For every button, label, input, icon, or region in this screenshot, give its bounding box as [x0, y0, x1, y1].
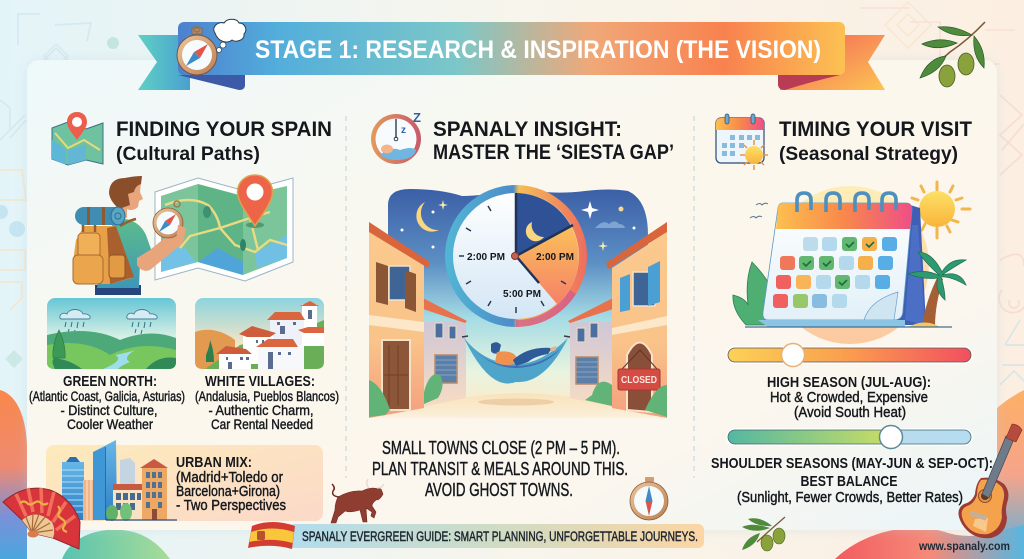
heading text: SPANALY INSIGHT:	[433, 118, 622, 141]
heading second line: MASTER THE ‘SIESTA GAP’	[433, 141, 674, 164]
icon: compass bottom	[630, 477, 668, 520]
heading text: FINDING YOUR SPAIN	[116, 118, 332, 141]
siesta clock	[445, 185, 587, 327]
ground line	[745, 326, 952, 328]
icon: compass with thought cloud	[177, 19, 246, 75]
hammock	[462, 336, 570, 384]
text: siesta advice: PLAN TRANSIT & MEALS AROUND THIS.	[372, 458, 628, 479]
website url: www.spanaly.com	[918, 539, 1010, 553]
icon: guitar	[958, 424, 1022, 538]
illustration: traveler with map	[73, 175, 293, 295]
closed sign	[618, 350, 660, 390]
text: shoulder seasons: (Sunlight, Fewer Crowds, Better Rates)	[737, 490, 963, 506]
decorative background patterns	[0, 2, 1024, 385]
text: green north: (Atlantic Coast, Galicia, Asturias)	[29, 389, 185, 404]
halo	[771, 186, 929, 344]
icon: bull	[331, 479, 384, 523]
card: green north illustration	[47, 298, 176, 369]
icon: olive branch top right	[920, 22, 985, 87]
icon: red fan	[3, 488, 80, 549]
fold-out map	[155, 178, 293, 281]
right houses	[568, 222, 667, 418]
text: high season: HIGH SEASON (JUL-AUG):	[767, 374, 931, 391]
text: green north: - Distinct Culture,	[60, 402, 158, 418]
card: urban mix	[46, 440, 323, 521]
icon: sleep clock: z	[401, 125, 406, 136]
city skyline	[62, 440, 177, 521]
text: siesta advice	[372, 437, 628, 500]
footer banner: SPANALY EVERGREEN GUIDE: SMART PLANNING, UNFORGETTABLE JOURNEYS.	[302, 529, 698, 544]
title text: STAGE 1: RESEARCH & INSPIRATION (THE VISION)	[255, 36, 821, 64]
ground	[369, 393, 668, 418]
icon: olive branch footer	[742, 517, 785, 551]
bushes	[369, 374, 667, 417]
urban mix text: URBAN MIX:	[176, 454, 252, 471]
text: green north	[29, 373, 185, 432]
sun	[912, 182, 970, 238]
calendar day cells	[773, 237, 897, 308]
card: white villages illustration	[195, 298, 324, 369]
left leaf	[733, 262, 770, 325]
page curl	[864, 292, 898, 320]
subheading text: (Seasonal Strategy)	[779, 144, 958, 165]
text: high season	[767, 374, 931, 421]
text: shoulder seasons: BEST BALANCE	[800, 473, 898, 490]
evening sky	[388, 186, 648, 405]
title ribbon	[138, 22, 885, 90]
birds	[750, 203, 768, 218]
palm tree	[908, 252, 966, 326]
urban mix text: (Madrid+Toledo or	[176, 469, 283, 486]
text: white villages: (Andalusia, Pueblos Blancos)	[195, 389, 339, 404]
calendar rings	[797, 193, 896, 212]
main panel	[27, 60, 997, 530]
text: green north: Cooler Weather	[67, 416, 153, 432]
ribbon tail right	[780, 35, 885, 90]
siesta clock: 2:00 PM	[536, 251, 574, 263]
text: white villages: Car Rental Needed	[211, 416, 313, 432]
illustration: calendar scene	[733, 182, 970, 344]
slider: high season	[726, 344, 973, 366]
icon: sleep clock	[371, 110, 421, 164]
icon: sleep clock: Z	[413, 110, 421, 125]
heading: timing your visit	[716, 114, 972, 170]
heading: finding your spain	[52, 112, 332, 165]
siesta clock: 2:00 PM	[467, 251, 505, 263]
ribbon main band	[178, 22, 845, 75]
column dividers	[346, 116, 694, 478]
footer banner	[288, 524, 704, 548]
icon: spanish flag	[248, 522, 295, 549]
bottom corner colour blobs	[0, 390, 1024, 559]
text: shoulder seasons	[711, 455, 993, 506]
closed sign: CLOSED	[621, 375, 657, 386]
ribbon tail left	[138, 35, 190, 90]
illustration: siesta scene	[369, 185, 668, 418]
ribbon fold left	[178, 75, 245, 90]
text: white villages: WHITE VILLAGES:	[205, 373, 315, 390]
calendar page	[763, 203, 912, 320]
ribbon fold right	[778, 75, 840, 90]
calendar back	[895, 205, 926, 325]
urban mix text	[176, 454, 286, 514]
urban mix text: - Two Perspectives	[176, 497, 286, 514]
traveler	[73, 176, 186, 295]
siesta clock: 5:00 PM	[503, 288, 541, 300]
sand mound	[908, 322, 940, 327]
left houses	[369, 222, 467, 418]
heading: spanaly insight	[371, 110, 674, 164]
village houses	[216, 301, 324, 369]
heading text: TIMING YOUR VISIT	[779, 118, 972, 141]
map pin	[238, 175, 272, 228]
slider: shoulder seasons	[726, 426, 973, 448]
hand-held compass	[153, 201, 186, 240]
text: high season: Hot & Crowded, Expensive	[770, 390, 928, 406]
text: white villages: - Authentic Charm,	[208, 402, 314, 418]
text: siesta advice: SMALL TOWNS CLOSE (2 PM – 5 PM).	[382, 437, 620, 458]
icon: map with pin	[52, 112, 103, 165]
stars and moon	[400, 200, 636, 251]
text: high season: (Avoid South Heat)	[794, 405, 906, 421]
text: white villages	[195, 373, 339, 432]
rain clouds	[60, 310, 157, 334]
urban mix text: Barcelona+Girona)	[176, 483, 280, 500]
text: green north: GREEN NORTH:	[63, 373, 157, 390]
text: siesta advice: AVOID GHOST TOWNS.	[425, 479, 573, 500]
icon: calendar and sun	[716, 114, 768, 170]
subheading text: (Cultural Paths)	[116, 144, 260, 165]
